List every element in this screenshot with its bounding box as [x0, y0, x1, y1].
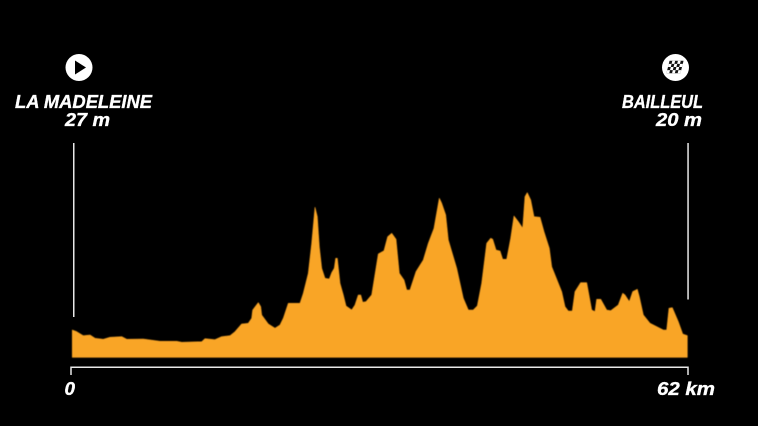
start marker line	[73, 143, 74, 317]
start label: La Madeleine 27 m: 27 m	[64, 110, 110, 130]
distance axis	[71, 367, 688, 375]
start label: La Madeleine 27 m: LA MADELEINE	[15, 92, 153, 112]
start label: La Madeleine 27 m	[15, 92, 153, 130]
finish label: Bailleul 20 m: 20 m	[655, 110, 702, 130]
icon: finish checkered flag	[662, 54, 689, 81]
icon: start play button	[66, 54, 92, 81]
distance label: 62 km: 62 km	[657, 379, 715, 399]
finish label: Bailleul 20 m	[622, 92, 703, 130]
finish marker line	[687, 143, 689, 300]
finish label: Bailleul 20 m: BAILLEUL	[622, 92, 703, 112]
distance label: 0: 0	[64, 379, 75, 399]
elevation profile	[72, 193, 687, 357]
